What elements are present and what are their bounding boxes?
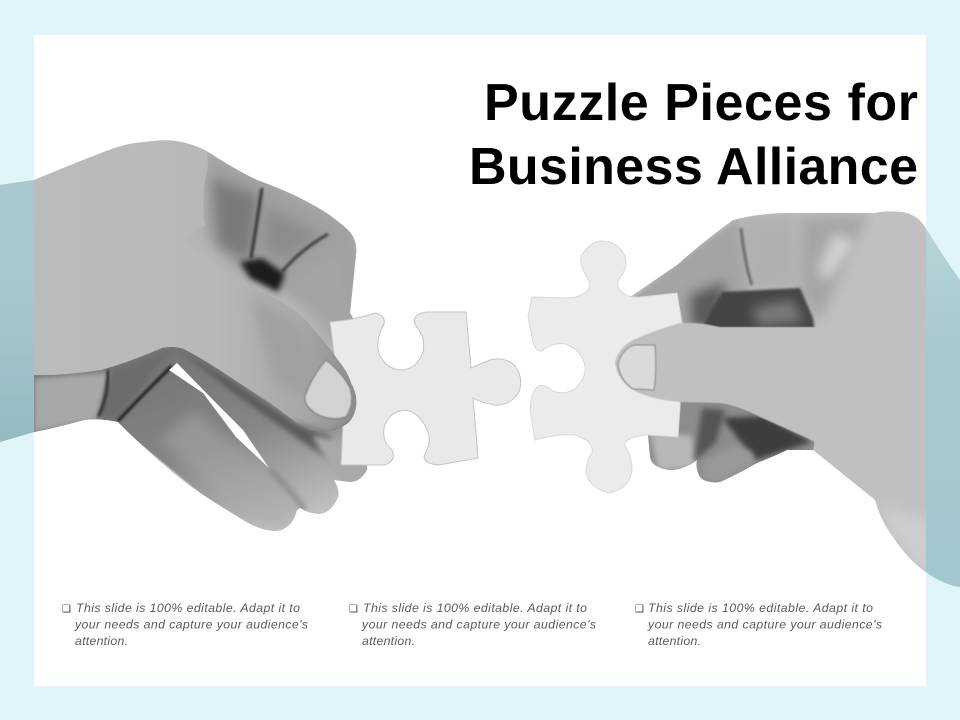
title: Business Alliance: [469, 138, 918, 196]
text block: left: This slide is 100% editable. Adapt it to: [76, 601, 300, 615]
text block: middle: your needs and capture your audience's: [361, 618, 596, 632]
text block: right: ❑: [635, 604, 644, 615]
puzzle piece: left: [330, 312, 521, 465]
text block: middle: ❑: [349, 604, 358, 615]
teal wrist overlay: left: [0, 170, 34, 450]
text block: right: [635, 601, 882, 648]
right hand: [625, 211, 960, 590]
text block: left: ❑: [62, 604, 71, 615]
title: Puzzle Pieces for: [484, 74, 918, 132]
title: [469, 74, 918, 196]
right thumb: [615, 323, 860, 472]
gap between fingers: [169, 363, 269, 468]
teal wrist overlay: right: [926, 205, 960, 595]
text block: left: your needs and capture your audience's: [74, 618, 308, 632]
right thumbnail: [618, 345, 656, 390]
puzzle piece: right: [528, 241, 682, 493]
left thumb: [0, 130, 356, 440]
text block: middle: This slide is 100% editable. Adapt it to: [363, 601, 587, 615]
text block: right: attention.: [648, 634, 701, 648]
text block: left: [62, 601, 308, 648]
left hand: [0, 140, 372, 535]
text block: middle: [349, 601, 596, 648]
text block: right: your needs and capture your audience's: [647, 618, 882, 632]
text block: right: This slide is 100% editable. Adapt it to: [648, 601, 873, 615]
left thumbnail: [305, 360, 352, 419]
text block: middle: attention.: [362, 634, 415, 648]
text block: left: attention.: [75, 634, 128, 648]
